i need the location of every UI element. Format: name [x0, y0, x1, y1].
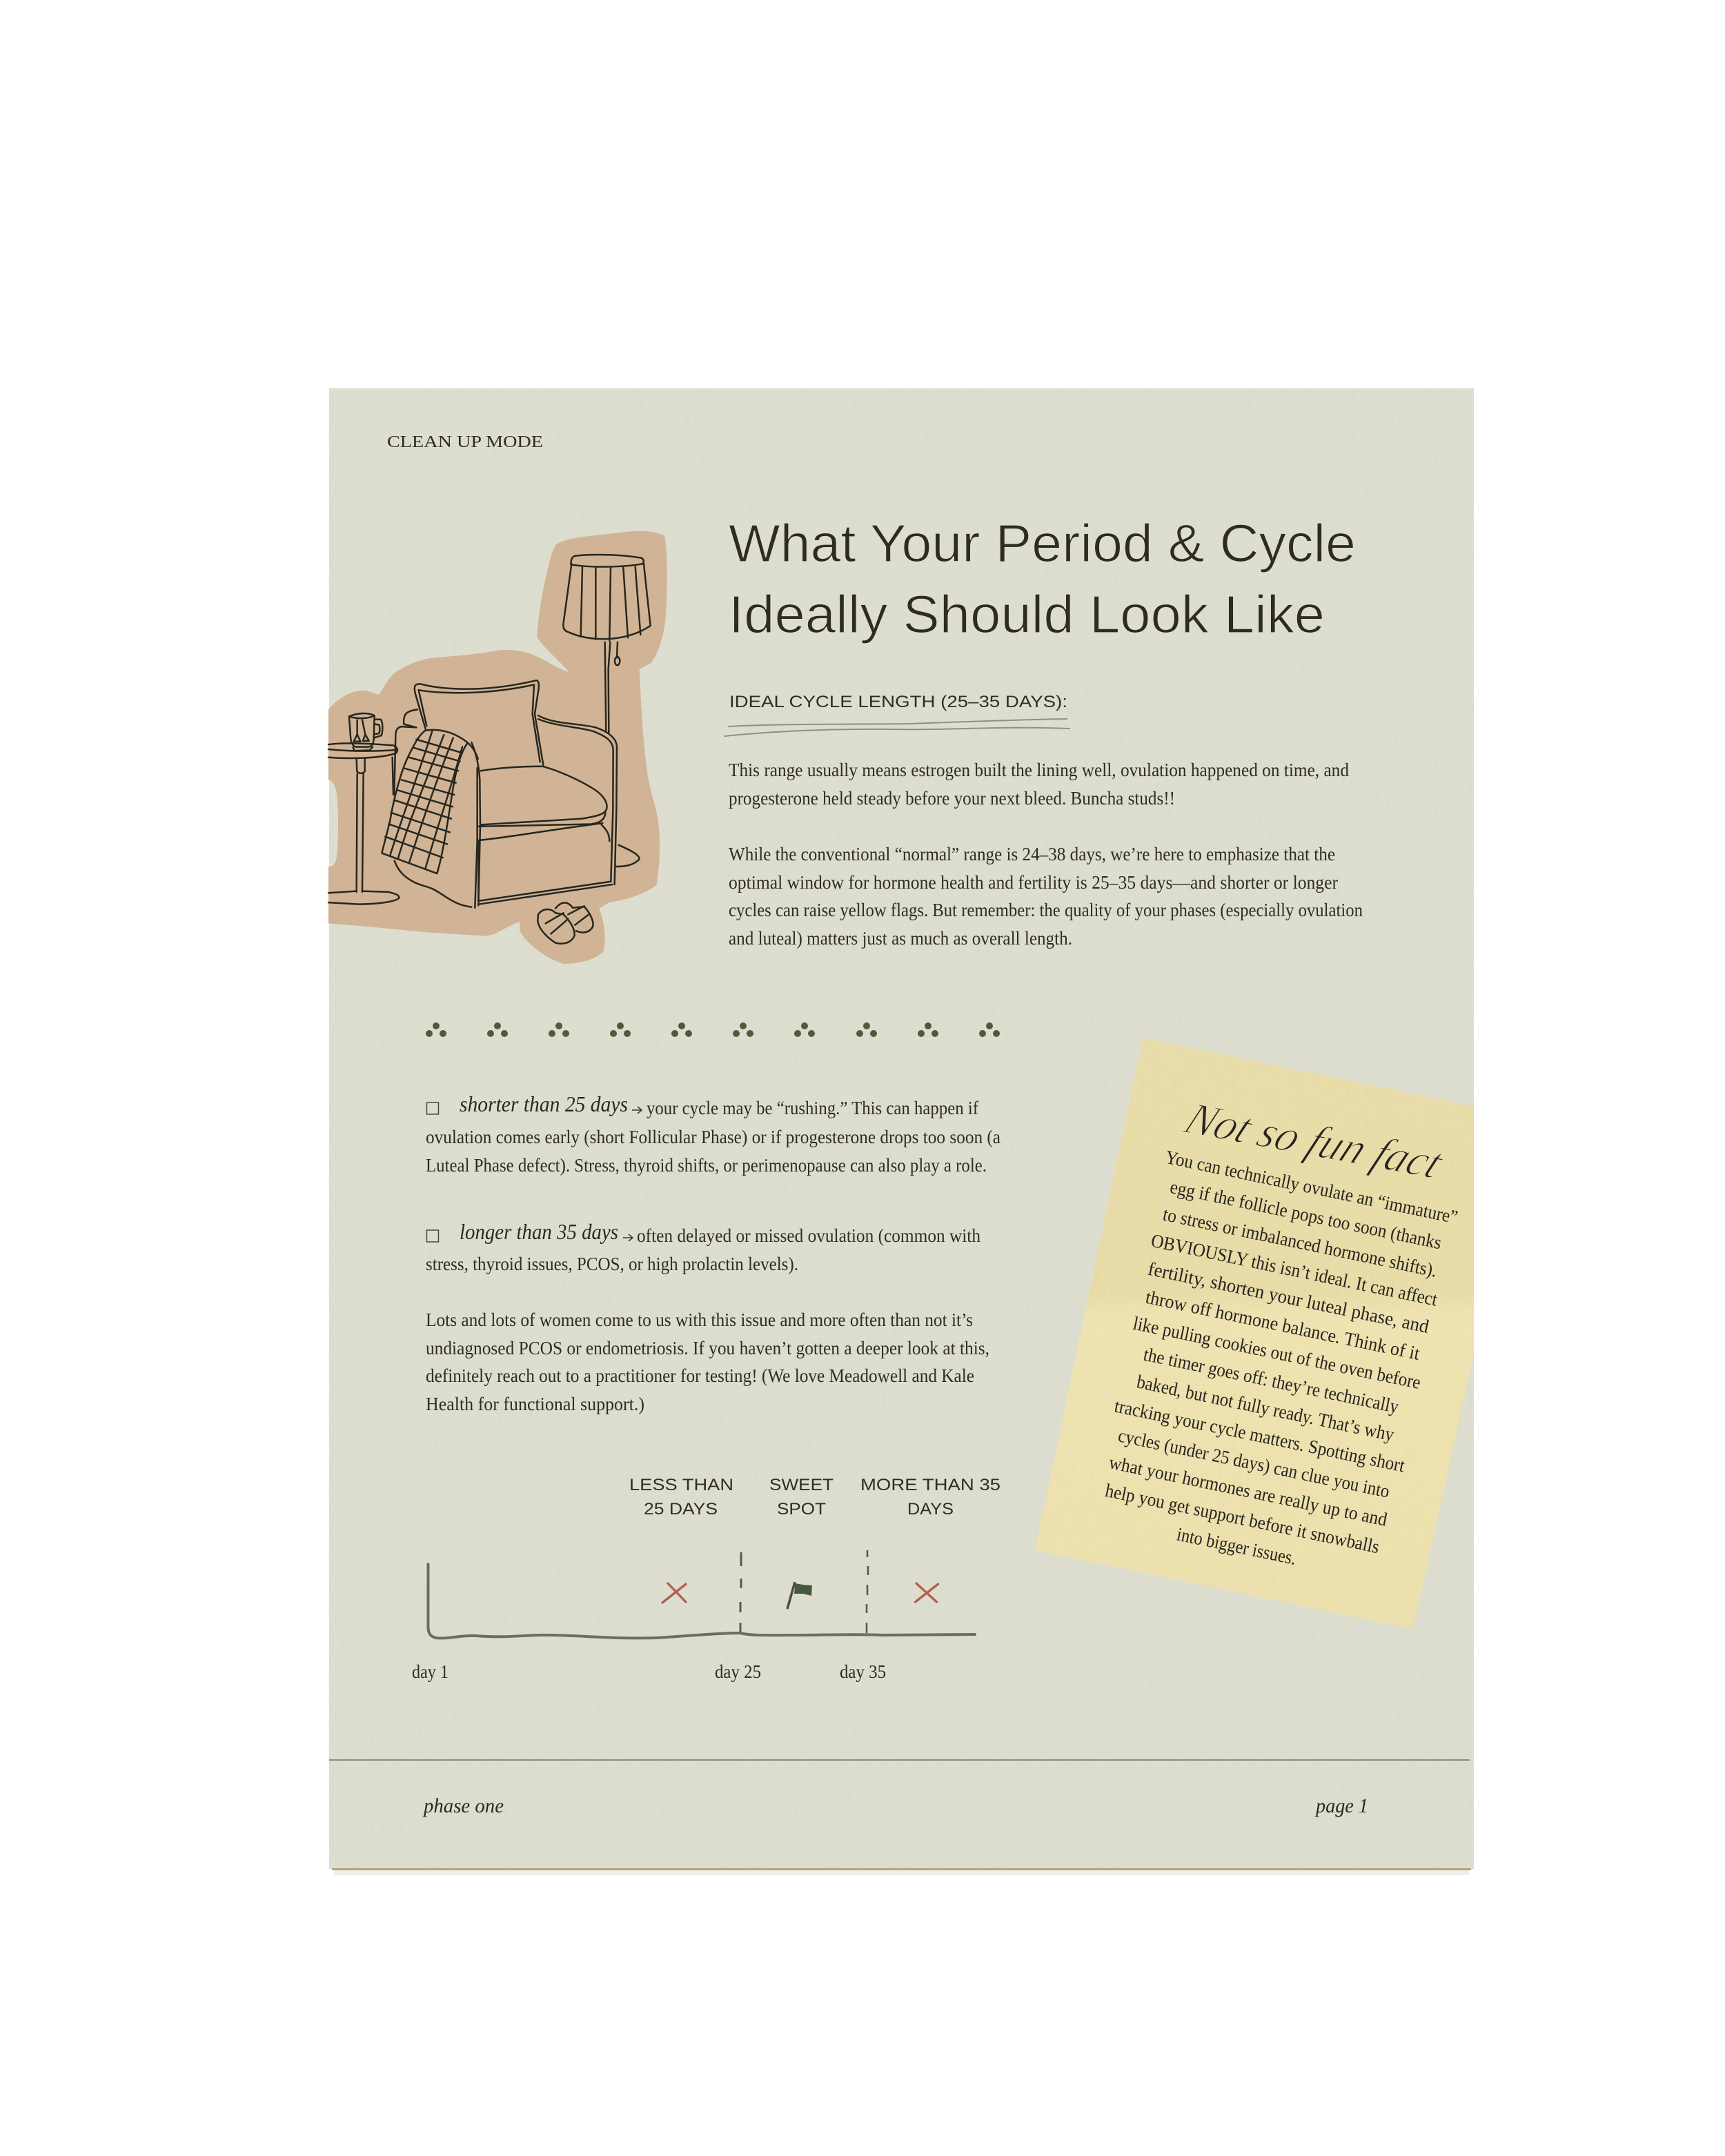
checklist item: longer than 35 days — [426, 1219, 980, 1274]
arrow — [623, 1234, 633, 1241]
note body text: You can technically ovulate an “immature” — [1163, 1146, 1460, 1228]
paragraph: practitioner advice: Lots and lots of women come to us with this issue and more often than not it’s — [426, 1309, 973, 1330]
paragraph: practitioner advice: Health for functional support.) — [426, 1394, 644, 1414]
note body text: fertility, shorten your luteal phase, and — [1146, 1258, 1431, 1337]
chart label: more than 35 days — [860, 1476, 1000, 1519]
tan background blob — [328, 531, 667, 964]
checklist item: shorter than 25 days: Luteal Phase defect). Stress, thyroid shifts, or perimenopause can also play a role. — [426, 1155, 987, 1176]
intro paragraph: This range usually means estrogen built the lining well, ovulation happened on time, and — [729, 760, 1349, 780]
note body text: like pulling cookies out of the oven before — [1132, 1312, 1423, 1393]
timeline axis — [428, 1564, 975, 1638]
note handwritten heading: Not so fun fact — [1176, 1094, 1452, 1188]
title — [729, 514, 1356, 644]
checkbox — [426, 1102, 439, 1114]
note body text: egg if the follicle pops too soon (thanks — [1168, 1176, 1443, 1253]
chart label: more than 35 days: MORE THAN 35 — [860, 1476, 1000, 1494]
chart label: sweet spot: SPOT — [777, 1500, 826, 1519]
note body text: throw off hormone balance. Think of it — [1144, 1286, 1422, 1364]
chart label: less than 25 days — [629, 1476, 733, 1519]
icon: floor lamp — [563, 555, 651, 867]
page bottom edge — [332, 1868, 1471, 1870]
pencil underline — [724, 719, 1070, 736]
second paragraph: While the conventional “normal” range is 24–38 days, we’re here to emphasize that the — [729, 844, 1335, 864]
checklist item: shorter than 25 days: ovulation comes early (short Follicular Phase) or if progesterone drops too soon (a — [426, 1127, 1000, 1147]
intro paragraph — [729, 760, 1349, 809]
icon: green flag — [787, 1582, 812, 1609]
icon: red x, too long — [915, 1583, 938, 1602]
note body text: into bigger issues. — [1175, 1523, 1299, 1569]
checklist item: shorter than 25 days: your cycle may be “rushing.” This can happen if — [647, 1098, 978, 1118]
checklist item: longer than 35 days: stress, thyroid issues, PCOS, or high prolactin levels). — [426, 1254, 798, 1274]
note paper — [1035, 1038, 1474, 1629]
note body text: cycles (under 25 days) can clue you into — [1116, 1424, 1392, 1502]
icon: armchair — [394, 680, 617, 908]
illustration: armchair, lamp and side table — [328, 531, 667, 964]
item heading: longer than 35 days — [460, 1219, 618, 1244]
chart: cycle length timeline — [412, 1476, 1000, 1682]
icon: side table — [328, 743, 399, 904]
axis label: day 25: day 25 — [715, 1661, 761, 1682]
dot divider — [426, 1022, 1000, 1037]
chart label: less than 25 days: LESS THAN — [629, 1476, 733, 1494]
chart label: less than 25 days: 25 DAYS — [644, 1500, 718, 1519]
note body text: the timer goes off: they’re technically — [1142, 1343, 1401, 1417]
second paragraph — [729, 844, 1363, 949]
chart label: sweet spot — [769, 1476, 834, 1519]
item heading: shorter than 25 days — [460, 1091, 628, 1116]
title: Ideally Should Look Like — [729, 585, 1325, 644]
checklist item: shorter than 25 days — [426, 1091, 1000, 1176]
section label: CLEAN UP MODE — [387, 433, 543, 451]
title: What Your Period & Cycle — [729, 514, 1356, 573]
footer right: page number: page 1 — [1314, 1794, 1368, 1817]
second paragraph: optimal window for hormone health and fertility is 25–35 days—and shorter or longer — [729, 872, 1338, 893]
arrow — [632, 1107, 642, 1114]
chart label: sweet spot: SWEET — [769, 1476, 834, 1494]
sticky note: not so fun fact — [1035, 1038, 1474, 1629]
dashed marker: day 25 — [740, 1552, 741, 1632]
note body text: baked, but not fully ready. That’s why — [1135, 1370, 1396, 1445]
note body text — [1089, 1146, 1460, 1587]
axis label: day 1: day 1 — [412, 1661, 448, 1682]
intro paragraph: progesterone held steady before your next bleed. Buncha studs!! — [729, 788, 1175, 809]
axis label: day 35: day 35 — [840, 1661, 886, 1682]
line art — [328, 555, 651, 944]
note body text: to stress or imbalanced hormone shifts). — [1161, 1203, 1439, 1281]
note body text: what your hormones are really up to and — [1107, 1451, 1389, 1530]
icon: red x, too short — [662, 1583, 686, 1603]
note body text: OBVIOUSLY this isn’t ideal. It can affect — [1150, 1229, 1439, 1310]
paragraph: practitioner advice: undiagnosed PCOS or endometriosis. If you haven’t gotten a deeper look at this, — [426, 1338, 989, 1358]
paragraph: practitioner advice — [426, 1309, 989, 1414]
chart label: more than 35 days: DAYS — [907, 1500, 954, 1519]
subheading: ideal cycle length: IDEAL CYCLE LENGTH (25–35 DAYS): — [729, 693, 1067, 711]
checkbox — [426, 1230, 439, 1242]
note body text: help you get support before it snowballs — [1103, 1479, 1381, 1557]
icon: mug with tea bags — [349, 713, 382, 751]
note body text: tracking your cycle matters. Spotting short — [1113, 1394, 1407, 1476]
second paragraph: cycles can raise yellow flags. But remember: the quality of your phases (especially ovulation — [729, 900, 1363, 920]
footer — [329, 1759, 1470, 1817]
dashed marker: day 35 — [867, 1550, 868, 1633]
icon: slippers — [538, 902, 593, 944]
footer left: phase one: phase one — [422, 1794, 504, 1817]
second paragraph: and luteal) matters just as much as overall length. — [729, 928, 1072, 949]
paragraph: practitioner advice: definitely reach out to a practitioner for testing! (We love Meadowell and Kale — [426, 1365, 974, 1386]
icon: plaid throw blanket — [382, 730, 478, 873]
checklist item: longer than 35 days: often delayed or missed ovulation (common with — [637, 1225, 980, 1246]
page sheet — [329, 388, 1474, 1875]
